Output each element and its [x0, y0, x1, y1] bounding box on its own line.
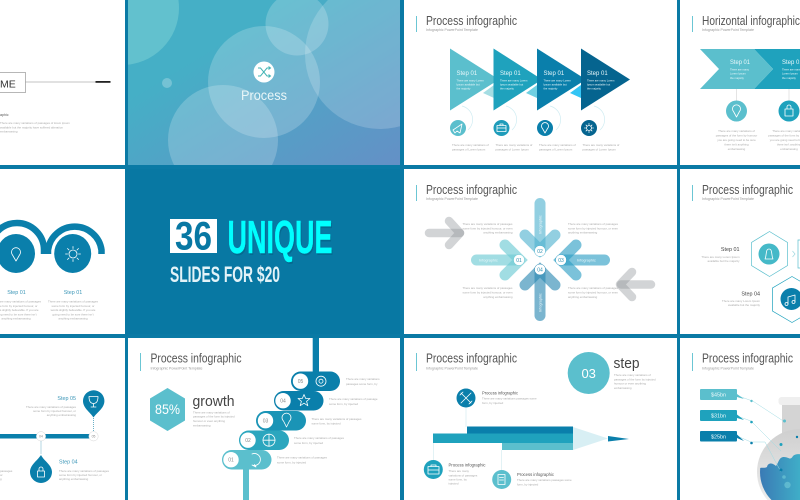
number badges — [514, 246, 566, 275]
step labels: Step 01 — [587, 71, 608, 77]
step captions: There are many variations of passages — [48, 300, 99, 304]
arm labels: Infographic — [538, 215, 542, 234]
label: briefcase: injected — [448, 482, 459, 486]
label: document — [517, 472, 572, 486]
left arrow — [476, 245, 520, 275]
value tags: $45bn — [711, 392, 726, 398]
step 1 label — [701, 247, 740, 263]
heading — [416, 183, 517, 201]
step labels: Step 01 — [500, 71, 521, 77]
panel: hexagon process — [692, 183, 800, 322]
step pill 02: There are many variations of passages — [294, 436, 345, 440]
step 4 text: some form by injected humour, or — [59, 473, 102, 477]
name slide text: There are many variations of passages of lorem ipsum — [0, 121, 70, 125]
heading: Process infographic — [150, 352, 242, 366]
label: tools: There are many variations passages some — [482, 396, 537, 400]
pin: lock — [30, 442, 52, 483]
step labels: Ipsum available but — [544, 82, 567, 86]
number badge: 36 — [175, 214, 212, 258]
step labels: There are many Lorem — [456, 78, 485, 82]
heading: Infographic PowerPoint Template — [426, 197, 478, 201]
step captions: Step 01 — [7, 290, 26, 296]
step 4 label: Step 04 — [741, 292, 760, 298]
step captions: There are many variations of — [582, 143, 619, 147]
chevron labels: Lorem Ipsum — [730, 72, 746, 76]
step captions: passages of Lorem Ipsum — [582, 148, 616, 152]
hexagon: next step — [798, 240, 800, 268]
step 4 label: available but the majority — [728, 303, 761, 307]
step captions: Step 01 — [64, 290, 82, 296]
growth text — [192, 393, 235, 428]
clipped left text: g — [0, 477, 2, 481]
step labels: Ipsum available but — [587, 82, 610, 86]
side captions: anything embarrassing — [483, 230, 513, 234]
clipped left text: passages — [0, 469, 13, 473]
growth text: There are many variations of — [193, 410, 230, 414]
name box: ME — [0, 78, 16, 90]
heading — [416, 352, 517, 371]
label: briefcase: Process infographic — [448, 462, 486, 468]
headline: UNIQUE — [228, 213, 334, 265]
step labels: Ipsum available but — [500, 82, 523, 86]
chevron labels: the majority — [782, 76, 797, 80]
step pill 03: There are many variations of passages — [312, 417, 362, 421]
step labels: There are many Lorem — [500, 78, 528, 82]
panel: process cover — [65, 0, 455, 195]
step captions: anything embarrassing — [1, 316, 31, 320]
step pill 02: some form, by injected — [294, 441, 323, 445]
step 5 text — [26, 396, 77, 417]
triangle arrows — [450, 48, 630, 110]
step captions: words slightly believable. If you are — [51, 308, 96, 312]
decorative circles — [65, 0, 455, 195]
chevron captions — [716, 129, 800, 151]
step pill 04: some form, by injected — [329, 402, 358, 406]
timeline nodes — [36, 432, 98, 441]
name slide text: embarrassing — [0, 130, 18, 134]
step badge — [568, 352, 610, 394]
label: tools: Process infographic — [482, 390, 518, 396]
headline — [228, 211, 334, 265]
step 5 text: Step 05 — [57, 396, 76, 402]
number badges: 01 — [516, 258, 522, 264]
number badges: 03 — [558, 258, 564, 264]
icon: briefcase — [424, 460, 443, 479]
chevron captions: passages of the form by humour — [716, 134, 757, 138]
growth text: humour or even anything — [193, 419, 225, 423]
connector line — [26, 81, 110, 83]
step pill 05: passages some form, by — [346, 382, 378, 386]
panel: flask chart — [692, 352, 800, 500]
chevron labels: the majority — [730, 76, 745, 80]
panel: timeline with pins — [0, 390, 110, 483]
step badge: 03 — [581, 366, 596, 381]
arm labels — [479, 215, 596, 312]
label: tools: form, by injected — [482, 401, 504, 405]
icon: shuffle — [254, 62, 274, 82]
step pill 05 — [291, 372, 380, 391]
step captions — [0, 290, 99, 320]
heading: Infographic PowerPoint Template — [426, 366, 478, 370]
heading: Infographic PowerPoint Template — [702, 366, 754, 370]
arm labels: Infographic — [479, 258, 498, 262]
step text: embarrassing — [614, 386, 632, 390]
icon: tools — [456, 388, 476, 408]
heading: Infographic PowerPoint Template — [702, 28, 754, 32]
label: document: form, by injected — [517, 482, 539, 486]
chevron labels: Step 01 — [730, 60, 751, 66]
grey arrow right — [620, 272, 651, 297]
step captions: There are many variations of — [496, 143, 532, 147]
side captions: some form by injected humour, or even — [463, 226, 513, 230]
step pill 04: 04 — [280, 398, 286, 404]
chevron captions: embarrassing — [780, 147, 798, 151]
step 5 text: anything embarrassing — [47, 413, 76, 417]
step 1 label: Step 01 — [721, 247, 740, 253]
clipped left text — [0, 469, 13, 481]
step 4 text — [59, 460, 110, 481]
step 4 text: There are many variations of passages — [59, 469, 110, 473]
grey arrow left — [429, 221, 460, 245]
chevron labels: There are many — [730, 68, 750, 72]
step labels: Ipsum available but — [456, 82, 480, 86]
heading — [140, 352, 242, 371]
hexagon: 85% — [150, 388, 185, 431]
connector lines — [434, 407, 502, 470]
step 4 text: Step 04 — [59, 460, 78, 466]
bottom arrow — [525, 270, 555, 316]
top arrow — [525, 204, 555, 250]
step labels: the majority — [456, 86, 471, 90]
chevron captions: There are many variations of — [718, 129, 755, 133]
heading: Infographic PowerPoint Template — [426, 28, 478, 32]
leader dots — [750, 400, 798, 472]
step pill 05: There are many variations — [346, 377, 380, 381]
leader lines — [737, 394, 784, 472]
timeline nodes: 05 — [92, 434, 95, 438]
pencil — [433, 426, 629, 450]
panel: pencil infographic — [416, 352, 656, 489]
heading — [692, 352, 793, 371]
pin: trophy — [83, 390, 104, 431]
panel: converging arrows — [416, 183, 651, 316]
name slide text: available but the majority have suffered alteration — [0, 126, 63, 130]
side captions: There are many variations of passages — [463, 286, 513, 290]
growth text: passages of the form by injected — [193, 414, 235, 418]
step text: passages of the form by injected — [614, 378, 656, 382]
step pill 03: 03 — [263, 418, 268, 424]
step icons — [450, 120, 597, 136]
number badges: 02 — [537, 249, 543, 255]
label: briefcase: There are many — [448, 469, 469, 473]
name slide text — [0, 113, 70, 134]
heading: Process infographic — [426, 14, 517, 28]
chevron labels: Lorem Ipsum — [782, 72, 798, 76]
value tags: $31bn — [711, 414, 726, 420]
growth text: growth — [192, 393, 234, 410]
step pill 03 — [256, 411, 362, 430]
side captions: some form by injected humour, or even — [463, 290, 513, 294]
label: briefcase: variations of passages — [448, 474, 478, 478]
number badges: 04 — [537, 268, 543, 274]
timeline band — [0, 434, 92, 438]
heading: Infographic PowerPoint Template — [702, 197, 754, 201]
step pill 01 — [222, 450, 328, 470]
side captions: anything embarrassing — [568, 295, 598, 299]
hexagon: step 1 — [752, 232, 788, 276]
growth text: embarrassing — [193, 424, 211, 428]
step labels: Step 01 — [456, 71, 478, 77]
step captions: passages of Lorem Ipsum — [539, 148, 573, 152]
arch bands — [0, 223, 102, 254]
step captions: passages of Lorem Ipsum — [452, 148, 486, 152]
label: briefcase — [448, 462, 486, 486]
heading: Process infographic — [426, 352, 517, 366]
chevron icons — [726, 89, 800, 122]
step pill 04 — [274, 391, 378, 410]
panel: arches — [0, 223, 102, 320]
label: document: Process infographic — [517, 472, 554, 477]
side captions: There are many variations of passages — [568, 286, 619, 290]
faint arcs — [462, 106, 605, 130]
step pill 01: some form, by injected — [277, 460, 306, 464]
step captions: There are many variations of — [452, 143, 489, 147]
panel: promotional banner — [125, 165, 404, 338]
side captions: There are many variations of passages — [463, 222, 513, 226]
icon: bulb circle — [0, 234, 35, 273]
step 5 text: some form by injected humour, or — [33, 409, 76, 413]
step labels: the majority — [544, 86, 558, 90]
label: document: There are many variations passages some — [517, 478, 572, 482]
step labels — [456, 71, 615, 90]
step labels: There are many Lorem — [587, 78, 615, 82]
heading: Infographic PowerPoint Template — [150, 366, 203, 370]
heading — [692, 183, 793, 201]
side captions: anything embarrassing — [483, 295, 513, 299]
arm labels: Infographic — [538, 293, 542, 312]
side captions: anything embarrassing — [568, 230, 598, 234]
step pill 02: 02 — [245, 438, 251, 444]
step 1 label: available but the majority — [708, 259, 740, 263]
step captions: There are many variations of — [539, 143, 576, 147]
side captions: some form by injected humour, or even — [568, 226, 618, 230]
label: briefcase: some form, by — [448, 478, 467, 482]
chevrons — [700, 49, 800, 89]
step text — [614, 355, 656, 390]
step 5 text: There are many variations of passages — [26, 405, 77, 409]
value tags — [700, 389, 737, 442]
timeline nodes: 04 — [39, 434, 43, 438]
label: tools — [482, 390, 537, 405]
side captions — [463, 222, 619, 299]
panel: horizontal infographic — [692, 14, 800, 151]
step captions: anything embarrassing — [58, 316, 88, 320]
hexagon: step 4 — [772, 276, 800, 322]
price line: SLIDES FOR $20 — [170, 262, 280, 287]
step captions — [452, 143, 619, 152]
step labels: There are many Lorem — [544, 78, 572, 82]
right arrow — [561, 245, 604, 275]
step text: There are many variations of — [614, 373, 651, 377]
step pill 05: 05 — [298, 379, 303, 385]
chevron captions: embarrassing — [728, 147, 746, 151]
side captions: some form by injected humour, or even — [568, 290, 618, 294]
arm labels: Infographic — [577, 258, 596, 262]
icon: document — [492, 470, 511, 489]
step pill 04: There are many variations of passage — [329, 397, 378, 401]
step pill 01: 01 — [228, 458, 234, 464]
value tags: $25bn — [711, 434, 726, 440]
step 4 label — [722, 292, 761, 307]
headline: UNIQUE — [228, 211, 332, 263]
step captions: some form by injected humour, or — [52, 304, 94, 308]
chevron labels — [730, 60, 800, 80]
side captions: There are many variations of passages — [568, 222, 619, 226]
step pill 02 — [239, 430, 345, 450]
step labels: the majority — [500, 86, 515, 90]
panel: growth staircase — [140, 338, 380, 500]
panel: process arrows — [416, 14, 630, 152]
icon: sun circle — [54, 234, 91, 273]
clipped left text: or — [0, 473, 3, 477]
step pill 01: There are many variations of passages — [277, 456, 328, 460]
step text: humour or even anything — [614, 382, 646, 386]
step 4 label: There are many Lorem Ipsum — [722, 299, 761, 303]
heading — [416, 14, 517, 32]
step labels: the majority — [587, 86, 602, 90]
panel: name slide fragment — [0, 72, 110, 134]
hexagon: 85%: 85% — [155, 401, 180, 417]
flask — [757, 397, 800, 500]
step 1 label: There are many Lorem Ipsum — [701, 255, 740, 259]
step pill 03: some form, by injected — [312, 422, 341, 426]
step 4 text: anything embarrassing — [59, 477, 89, 481]
connector top — [313, 338, 319, 372]
step captions: passages of Lorem Ipsum — [496, 148, 529, 152]
cover heading: Process — [241, 88, 287, 103]
chevron captions: you are going need to be sure — [717, 138, 756, 142]
chevron captions: there isn't anything — [724, 142, 749, 146]
step labels: Step 01 — [544, 71, 565, 77]
name slide text: aphic — [0, 113, 9, 117]
connector bottom — [243, 468, 249, 500]
chevron — [792, 251, 795, 257]
step captions: going need to be sure there isn't — [52, 312, 94, 316]
heading: Process infographic — [426, 183, 517, 197]
step text: step — [614, 355, 640, 372]
